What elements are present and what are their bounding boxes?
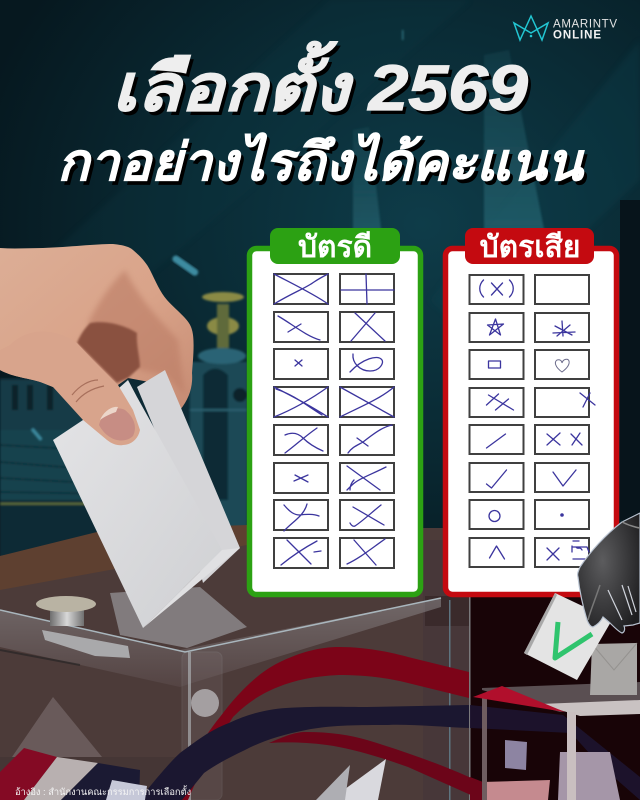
panel: valid ballots bbox=[250, 228, 420, 594]
heading tab: spoiled bbox=[465, 228, 594, 264]
panel: spoiled ballots bbox=[446, 228, 616, 594]
screw bbox=[191, 689, 219, 717]
hand holding ballot bbox=[0, 244, 240, 628]
source credit: อ้างอิง : สำนักงานคณะกรรมการการเลือกตั้ง bbox=[15, 787, 191, 797]
heading tab: valid bbox=[270, 228, 400, 264]
background: dark teal sky bbox=[0, 0, 640, 560]
logo: Amarin TV Online bbox=[514, 16, 617, 40]
spoiled ballot marks grid bbox=[470, 275, 595, 567]
Thai flag ribbon bbox=[0, 647, 640, 800]
ballot with green check bbox=[524, 593, 612, 680]
title line 1: เลือกตั้ง 2569 bbox=[112, 52, 528, 124]
hand bbox=[0, 244, 194, 410]
glass ballot box bbox=[0, 587, 470, 800]
heading: valid ballots: บัตรดี bbox=[298, 231, 372, 264]
heading: spoiled ballots: บัตรเสีย bbox=[480, 231, 580, 264]
folded ballot paper bbox=[53, 370, 240, 628]
metal knob bbox=[36, 596, 130, 658]
valid ballot marks grid bbox=[274, 274, 394, 568]
side table bbox=[473, 682, 640, 800]
hand shading bbox=[88, 270, 185, 395]
background: brown table and box interior bbox=[0, 525, 640, 800]
gloved gray hand bbox=[578, 513, 640, 633]
logo crown icon bbox=[514, 16, 548, 40]
thumb bbox=[0, 331, 140, 445]
lid slot shard bbox=[110, 587, 247, 648]
glass lid bbox=[0, 598, 441, 687]
background: parliament towers bbox=[353, 30, 552, 270]
logo wordmark: AMARINTV bbox=[553, 18, 617, 30]
envelope bbox=[590, 643, 637, 695]
title line 2: กาอย่างไรถึงได้คะแนน bbox=[57, 134, 583, 192]
thumbnail bbox=[99, 408, 135, 441]
glass corner post bbox=[182, 652, 222, 800]
logo wordmark second line: ONLINE bbox=[553, 30, 601, 42]
background: parliament building bbox=[0, 292, 247, 558]
ballots in box bbox=[316, 740, 620, 800]
